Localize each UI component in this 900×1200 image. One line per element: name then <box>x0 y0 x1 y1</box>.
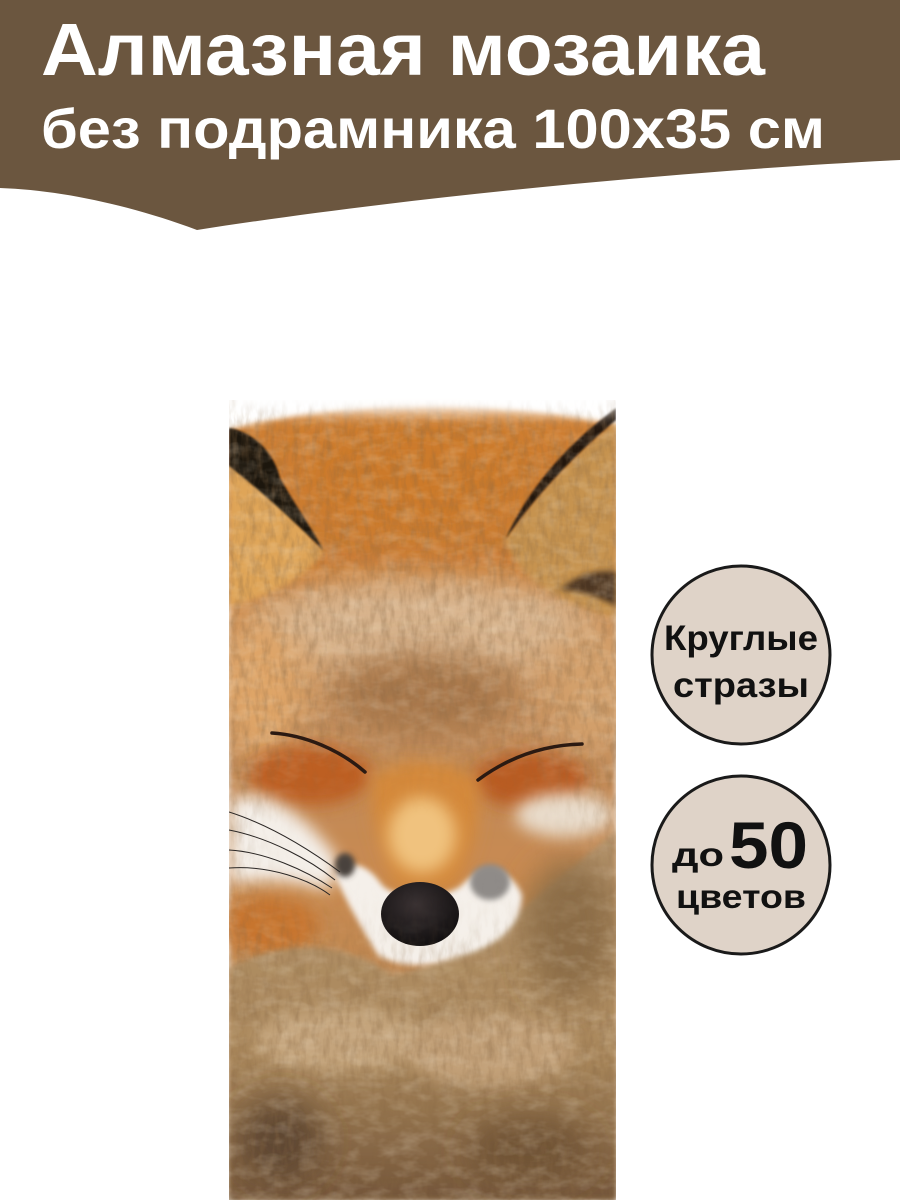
right ear <box>505 408 616 618</box>
cheek markings <box>222 745 588 953</box>
badge: round rhinestones: Круглые <box>664 619 818 658</box>
photo: sleeping fox <box>222 360 630 1200</box>
badge: up to 50 colours: цветов <box>676 878 806 915</box>
whiskers <box>229 812 340 895</box>
tail fur <box>229 830 616 1200</box>
closed eyes <box>272 733 582 780</box>
fur texture <box>229 400 616 1200</box>
badge: up to 50 colours: до <box>672 836 724 873</box>
nose <box>381 882 459 946</box>
badge: up to 50 colours <box>652 776 830 954</box>
badge: up to 50 colours: 50 <box>729 808 808 882</box>
left ear <box>229 428 324 606</box>
title: Алмазная мозаика <box>41 8 766 91</box>
subtitle: без подрамника 100х35 см <box>41 97 825 160</box>
white cheek fur <box>229 793 615 890</box>
header banner <box>0 0 900 230</box>
soft fur top edge <box>229 393 616 426</box>
badge: round rhinestones <box>652 566 830 744</box>
muzzle <box>335 760 522 965</box>
fox head fur <box>222 406 630 1200</box>
badge: round rhinestones: стразы <box>673 666 809 705</box>
